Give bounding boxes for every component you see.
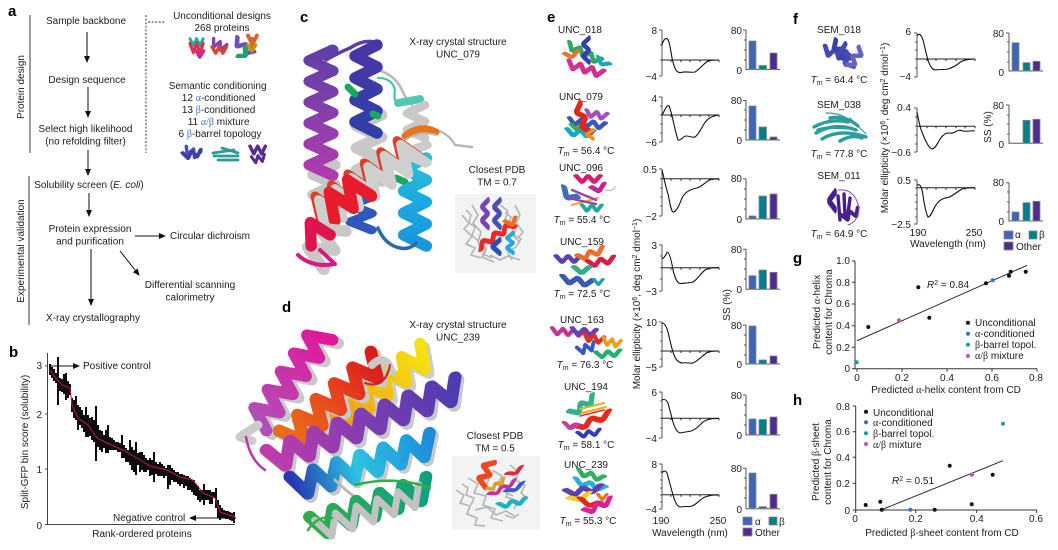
- y axis label: ellipticity: −1: [632, 222, 639, 230]
- CD chart: [891, 103, 975, 159]
- R squared: R: [892, 476, 899, 487]
- y tick labels: 2: [36, 410, 42, 421]
- icon: protein: [829, 190, 861, 225]
- step: expression and purification: and purification: [56, 236, 124, 248]
- row: UNC_159: [554, 237, 780, 301]
- x axis label: Rank-ordered proteins: [92, 529, 192, 540]
- CD chart: −2: [646, 212, 657, 223]
- temperature: = 64.9 °C: [823, 229, 867, 240]
- CD chart: −4: [900, 72, 911, 83]
- y ticks: 1.0: [836, 256, 850, 267]
- y axis label: ellipticity: ): [632, 219, 643, 222]
- y ticks: 0: [844, 506, 850, 517]
- CD chart: [646, 26, 719, 83]
- legend: α-conditioned: [975, 329, 1035, 340]
- panel letter a: a: [8, 3, 17, 20]
- R squared: 2: [934, 280, 938, 287]
- temperature: T: [811, 75, 818, 86]
- bar chart: 0: [998, 68, 1004, 79]
- panel letter h: h: [793, 392, 802, 409]
- y ticks: 0.2: [836, 479, 850, 490]
- temperature: m: [563, 365, 569, 372]
- temperature: = 58.1 °C: [570, 440, 614, 451]
- panel letter f: f: [793, 11, 799, 28]
- label: closest PDB: TM = 0.7: [477, 178, 517, 188]
- step: expression and purification: Protein expression: [49, 224, 131, 235]
- R squared: = 0.84: [938, 280, 969, 291]
- legend: α: [1015, 230, 1021, 241]
- dotted bracket: [146, 15, 165, 153]
- temperature: = 77.8 °C: [823, 149, 867, 160]
- temperature: T: [560, 516, 567, 527]
- icons: semantic designs: [182, 146, 266, 163]
- inset: closest PDB structure: [455, 194, 536, 273]
- panel c: crystal structure UNC_079: [298, 9, 536, 273]
- bar chart: 80: [993, 178, 1004, 189]
- panel b: solubility rank plot: [9, 344, 236, 540]
- legend: α: [755, 517, 761, 528]
- regression line: [882, 461, 1003, 510]
- name: SEM_018: [817, 25, 861, 36]
- y axis label: ellipticity: dmol: [880, 54, 891, 78]
- y tick labels: 0: [36, 521, 42, 532]
- x axis ticks and title: Wavelength (nm): [910, 239, 986, 250]
- y ticks: 0.4: [836, 321, 850, 332]
- y axis label: ellipticity: , deg cm: [632, 258, 643, 297]
- CD chart: −4: [646, 72, 657, 83]
- step: X-ray crystallography: X-ray crystallography: [46, 313, 140, 324]
- name: UNC_194: [564, 382, 608, 393]
- R squared: R: [927, 280, 934, 291]
- step: differential scanning calorimetry: calorimetry: [166, 292, 214, 304]
- bar chart: 80: [731, 96, 742, 107]
- bar chart: [993, 29, 1043, 79]
- axes: [852, 261, 1037, 372]
- CD chart: 0.4: [897, 103, 911, 114]
- CD chart: −3: [646, 287, 657, 298]
- error bars: [50, 357, 234, 523]
- arrow: [86, 32, 88, 62]
- bar chart: [731, 391, 780, 442]
- label: crystal structure: UNC_239: [436, 332, 480, 344]
- y axis label: ellipticity: Molar ellipticity (×10: [880, 125, 891, 213]
- stage label: experimental validation: Experimental validation: [16, 199, 27, 303]
- panel letter c: c: [300, 9, 308, 26]
- x ticks: 0.6: [1029, 514, 1043, 525]
- panel d: crystal structure UNC_239: [240, 299, 540, 540]
- name: UNC_018: [558, 25, 602, 36]
- x axis ticks and title: 250: [966, 228, 983, 239]
- step: select high likelihood: (no refolding filter): [45, 136, 126, 148]
- bar chart: 80: [731, 321, 742, 332]
- inset: closest PDB structure: [452, 456, 540, 530]
- temperature: = 72.5 °C: [566, 289, 610, 300]
- bar chart: 0: [736, 215, 742, 226]
- name: UNC_096: [559, 163, 603, 174]
- y axis label: ellipticity: dmol: [632, 230, 643, 254]
- legend: Unconditional: [975, 318, 1036, 329]
- legend: β-barrel topol.: [975, 340, 1036, 351]
- legend: α-conditioned: [873, 418, 933, 429]
- legend: β: [779, 517, 785, 528]
- bar chart: 0: [736, 285, 742, 296]
- temperature: T: [558, 146, 565, 157]
- y tick labels: 1: [36, 465, 42, 476]
- legend: β: [1039, 230, 1045, 241]
- icon: protein: [566, 469, 612, 515]
- bar chart: [731, 321, 780, 371]
- icons: unconditional designs: [190, 36, 257, 60]
- label: closest PDB: Closest PDB: [469, 165, 525, 176]
- arrow: [135, 235, 165, 237]
- icon: beta barrel: [814, 113, 866, 141]
- CD chart: 4: [651, 94, 657, 105]
- x axis ticks and title: 250: [710, 516, 727, 527]
- label: crystal structure: X-ray crystal structure: [409, 320, 507, 331]
- legend: [743, 517, 785, 539]
- y axis label: ellipticity: Molar ellipticity (×10: [632, 301, 643, 389]
- text: semantic conditioning: 13 β-conditioned: [182, 105, 255, 116]
- x axis title: Predicted β-sheet content from CD: [865, 528, 1019, 539]
- text: semantic conditioning: 12 α-conditioned: [182, 93, 255, 104]
- name: SEM_038: [817, 100, 861, 111]
- bar chart: 80: [731, 174, 742, 185]
- row: UNC_239: [560, 460, 780, 528]
- structure: UNC_239 ribbon: [240, 326, 466, 540]
- stage bars: [29, 15, 30, 325]
- row: UNC_163: [552, 315, 780, 374]
- x ticks: 0.2: [895, 373, 909, 384]
- regression line: [857, 265, 1027, 341]
- x ticks: 0: [854, 373, 860, 384]
- y ticks: 0.8: [836, 278, 850, 289]
- row: UNC_194: [558, 382, 780, 452]
- y axis label: SS: SS (%): [722, 289, 733, 321]
- arrow: negative control: [190, 517, 236, 519]
- bar chart: [731, 174, 780, 226]
- arrow: [87, 150, 89, 175]
- temperature: m: [560, 294, 566, 301]
- CD chart: 10: [646, 318, 657, 329]
- CD chart: [646, 94, 719, 149]
- CD chart: −2.5: [891, 220, 911, 231]
- CD chart: −4: [646, 434, 657, 445]
- bar chart: [993, 178, 1043, 228]
- temperature: m: [566, 521, 572, 528]
- label: negative control: Negative control: [113, 513, 185, 524]
- bar chart: 80: [731, 26, 742, 37]
- bar chart: 0: [998, 140, 1004, 151]
- panel letter g: g: [793, 250, 802, 267]
- CD chart: [646, 460, 719, 516]
- y axis label: ellipticity: 6: [632, 297, 639, 301]
- temperature: = 55.4 °C: [566, 215, 610, 226]
- CD chart: 0.5: [643, 165, 657, 176]
- y axis title: Predicted β-sheet: [811, 423, 822, 501]
- y axis label: SS: SS (%): [983, 111, 994, 143]
- panel letter b: b: [9, 344, 18, 361]
- y axis label: ellipticity: 6: [880, 121, 887, 125]
- R squared: 2: [899, 476, 903, 483]
- legend: Unconditional: [873, 408, 934, 419]
- bar chart: 80: [731, 391, 742, 402]
- CD chart: 3: [651, 241, 657, 252]
- temperature: T: [557, 360, 564, 371]
- y axis title: content for Chroma: [824, 269, 835, 355]
- bar chart: [731, 96, 780, 147]
- bar chart: 0: [736, 505, 742, 516]
- bar chart: [993, 101, 1043, 151]
- axes: [853, 406, 1037, 513]
- bar chart: 80: [731, 245, 742, 256]
- x ticks: 0.6: [985, 373, 999, 384]
- text: semantic conditioning: 11 α/β mixture: [188, 117, 250, 128]
- arrow: positive control: [50, 365, 79, 367]
- step: differential scanning calorimetry: Differential scanning: [145, 280, 235, 291]
- mean line: [50, 370, 235, 517]
- structure: UNC_079 ribbon: [298, 41, 472, 269]
- CD chart: [891, 176, 975, 231]
- bar chart: [731, 464, 780, 516]
- x ticks: 0.4: [970, 514, 984, 525]
- arrow: [120, 251, 139, 275]
- CD chart: −5: [646, 363, 657, 374]
- name: UNC_079: [559, 92, 603, 103]
- temperature: = 76.3 °C: [569, 360, 613, 371]
- R squared: = 0.51: [903, 476, 934, 487]
- CD chart: 0.5: [897, 176, 911, 187]
- temperature: T: [554, 215, 561, 226]
- icon: protein: [556, 247, 615, 287]
- temperature: T: [811, 229, 818, 240]
- y ticks: 0: [844, 364, 850, 375]
- y tick labels: 3: [36, 361, 42, 372]
- temperature: m: [560, 220, 566, 227]
- bar chart: 0: [736, 360, 742, 371]
- row: UNC_018: [558, 25, 780, 83]
- CD chart: [900, 27, 975, 83]
- arrow: [90, 249, 92, 305]
- name: UNC_239: [564, 460, 608, 471]
- scatter points: [864, 422, 1005, 512]
- y axis title: content for Chroma: [823, 419, 834, 505]
- CD chart: −0.6: [891, 148, 911, 159]
- panel g: alpha-helix scatter: [793, 250, 1043, 396]
- legend: β-barrel topol.: [873, 429, 934, 440]
- temperature: T: [554, 289, 561, 300]
- x ticks: 0: [852, 514, 858, 525]
- label: positive control: Positive control: [83, 361, 151, 372]
- temperature: m: [817, 234, 823, 241]
- arrow: [88, 193, 90, 216]
- legend: [864, 408, 934, 451]
- panel h: beta-sheet scatter: [793, 392, 1043, 539]
- icon: protein: [567, 103, 607, 139]
- y axis label: ellipticity: ): [880, 43, 891, 46]
- icon: protein: [560, 176, 616, 211]
- y axis label: Split-GFP bin score (solubility): [20, 375, 31, 509]
- y axis label: ellipticity: −1: [880, 46, 887, 54]
- legend: α/β mixture: [975, 351, 1024, 362]
- y ticks: 0.4: [836, 453, 850, 464]
- bar chart: 80: [993, 101, 1004, 112]
- row: SEM_038: [811, 100, 1043, 161]
- panel f: SEM designs: [793, 11, 1045, 253]
- CD chart: [643, 165, 719, 223]
- step: sample backbone: Sample backbone: [46, 16, 126, 27]
- step: design sequence: Design sequence: [48, 75, 126, 86]
- temperature: m: [564, 445, 570, 452]
- icon: protein: [565, 38, 610, 78]
- temperature: m: [817, 80, 823, 87]
- icon: protein: [552, 328, 621, 358]
- temperature: = 64.4 °C: [823, 75, 867, 86]
- axes: [45, 353, 235, 524]
- y ticks: 0.8: [836, 402, 850, 413]
- CD chart: [646, 241, 719, 298]
- legend: [1004, 230, 1045, 253]
- x axis ticks and title: 190: [910, 228, 926, 239]
- panel e: UNC designs: [547, 9, 785, 539]
- name: UNC_163: [560, 315, 604, 326]
- panel a: workflow: [8, 3, 271, 325]
- panel letter e: e: [547, 9, 555, 26]
- label: closest PDB: Closest PDB: [467, 431, 523, 442]
- row: UNC_079: [558, 92, 780, 158]
- CD chart: 8: [651, 26, 657, 37]
- text: unconditional designs: Unconditional designs: [173, 11, 271, 22]
- temperature: m: [817, 154, 823, 161]
- bar chart: 0: [736, 431, 742, 442]
- y ticks: 0.6: [836, 427, 850, 438]
- temperature: T: [811, 149, 818, 160]
- CD chart: [646, 388, 719, 445]
- panel letter d: d: [282, 299, 291, 316]
- y axis title: Predicted α-helix: [812, 275, 823, 349]
- legend: [966, 318, 1036, 362]
- CD chart: 8: [651, 460, 657, 471]
- x axis ticks and title: 190: [653, 516, 669, 527]
- icon: protein: [564, 394, 611, 438]
- y axis label: ellipticity: 2: [632, 254, 639, 258]
- temperature: = 56.4 °C: [570, 146, 614, 157]
- y ticks: 0.2: [836, 343, 850, 354]
- text: semantic conditioning: Semantic conditioning: [169, 81, 267, 92]
- CD chart: [646, 318, 719, 374]
- legend: Other: [755, 528, 781, 539]
- bar chart: 0: [998, 217, 1004, 228]
- x axis ticks and title: Wavelength (nm): [652, 528, 728, 539]
- bar chart: [731, 26, 780, 77]
- row: SEM_011: [811, 171, 1043, 241]
- scatter points: [855, 270, 1028, 364]
- CD chart: −4: [646, 505, 657, 516]
- name: SEM_011: [817, 171, 861, 182]
- temperature: = 55.3 °C: [572, 516, 616, 527]
- label: crystal structure: X-ray crystal structure: [409, 37, 507, 48]
- CD chart: 6: [905, 27, 911, 38]
- y ticks: 0.6: [836, 299, 850, 310]
- text: semantic conditioning: 6 β-barrel topology: [179, 129, 261, 140]
- temperature: T: [558, 440, 565, 451]
- stage label: protein design: Protein design: [16, 55, 27, 119]
- y axis label: ellipticity: 2: [880, 78, 887, 82]
- x axis title: Predicted α-helix content from CD: [871, 385, 1021, 396]
- name: UNC_159: [560, 237, 604, 248]
- legend: Other: [1016, 242, 1042, 253]
- arrow: [87, 87, 89, 117]
- step: select high likelihood: Select high likelihood: [39, 124, 132, 135]
- bar chart: 0: [736, 66, 742, 77]
- icon: protein: [823, 40, 865, 69]
- x ticks: 0.2: [909, 514, 923, 525]
- legend: α/β mixture: [873, 440, 922, 451]
- bar chart: 80: [731, 464, 742, 475]
- CD chart: −6: [646, 138, 657, 149]
- label: crystal structure: UNC_079: [436, 50, 480, 60]
- bar chart: 0: [736, 136, 742, 147]
- label: closest PDB: TM = 0.5: [475, 444, 515, 454]
- y axis label: ellipticity: , deg cm: [880, 82, 891, 121]
- x ticks: 0.4: [940, 373, 954, 384]
- row: SEM_018: [811, 25, 1043, 87]
- CD chart: 6: [651, 388, 657, 399]
- bar chart: [731, 245, 780, 296]
- row: UNC_096: [554, 163, 780, 227]
- text: unconditional designs: 268 proteins: [194, 23, 250, 34]
- temperature: m: [564, 151, 570, 158]
- step: solubility screen: Solubility screen (E. coli): [34, 180, 144, 191]
- x ticks: 0.8: [1029, 373, 1043, 384]
- step: circular dichroism: Circular dichroism: [170, 231, 250, 242]
- bar chart: 80: [993, 29, 1004, 40]
